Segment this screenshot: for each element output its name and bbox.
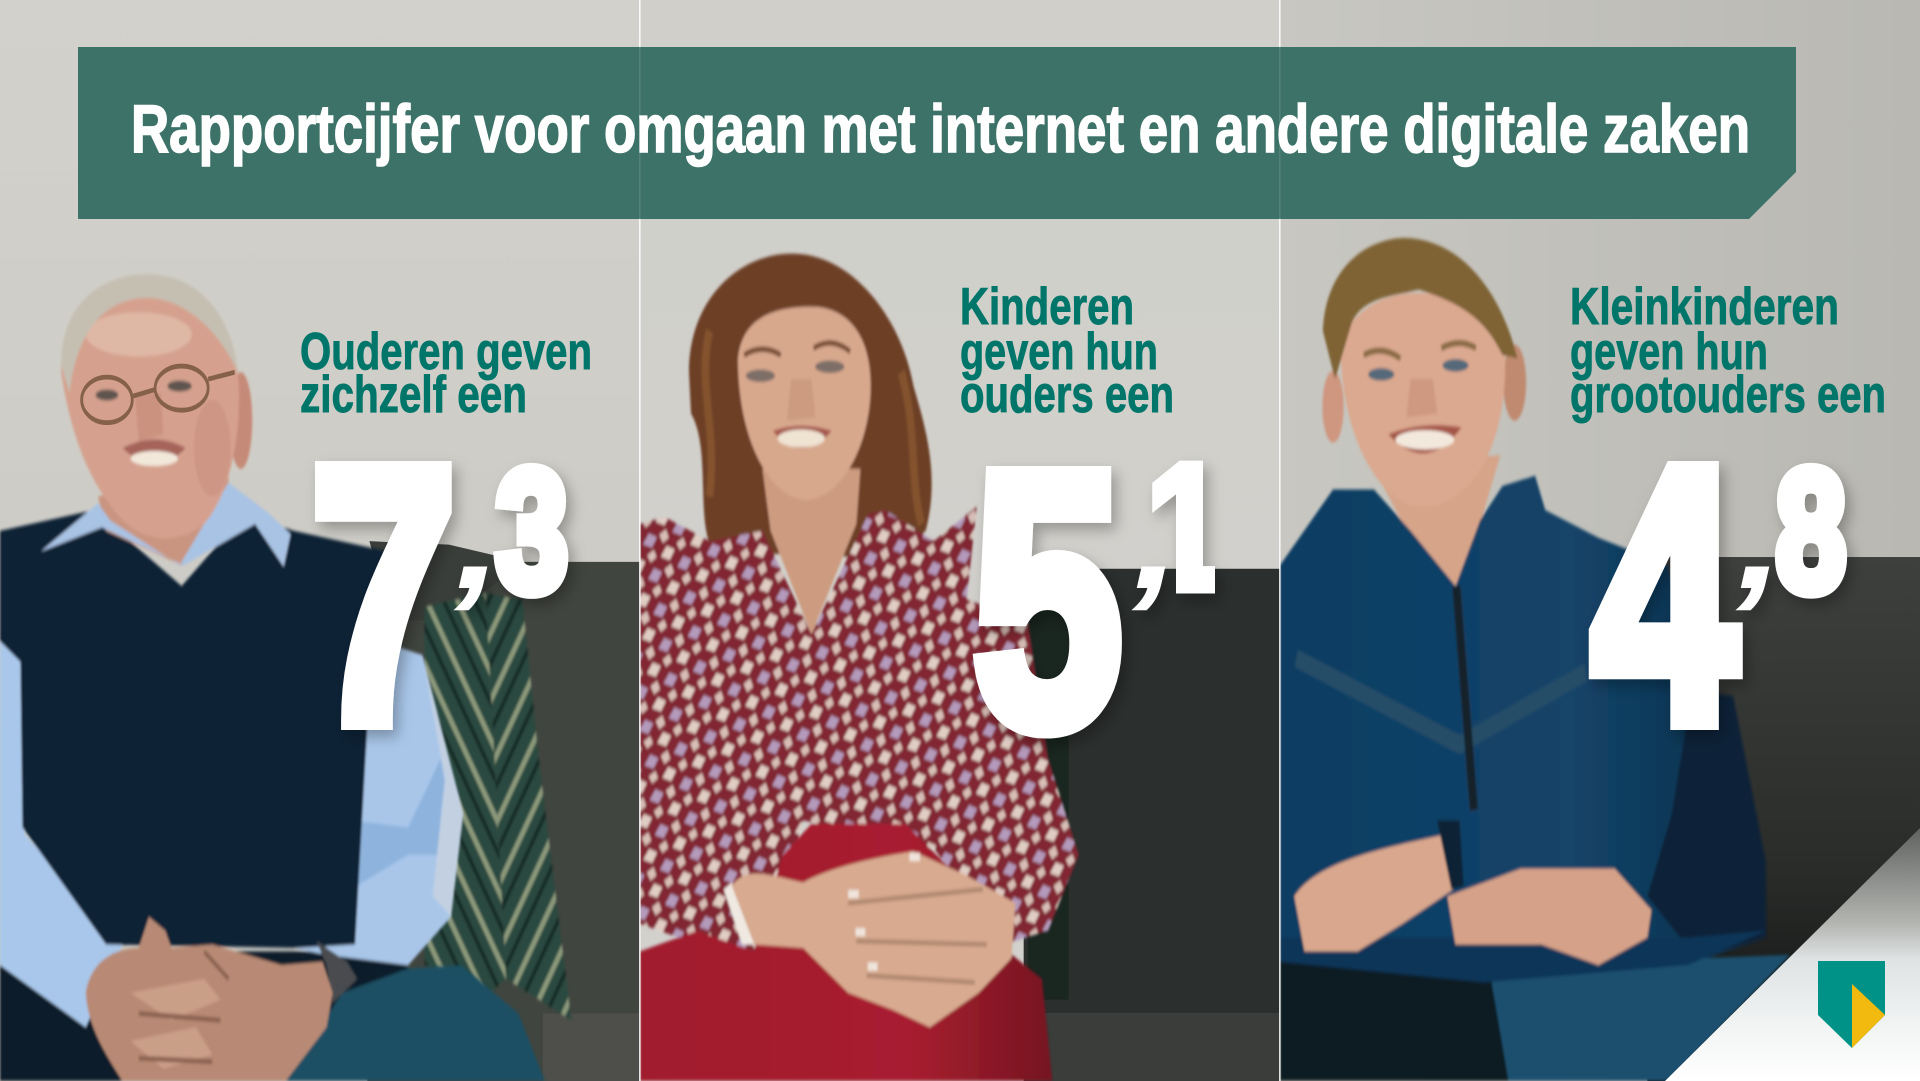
heading: ouderen: Ouderen geven: [300, 323, 592, 381]
jeans left: [1280, 951, 1541, 1081]
nose shade: [135, 393, 163, 441]
brows: [744, 343, 850, 355]
eyes: [746, 370, 775, 382]
wall: [640, 0, 1280, 1081]
sleeve shade: [356, 760, 445, 884]
nose shade: [1407, 379, 1437, 417]
icon: logo shield: [1818, 961, 1885, 1048]
panel: grandchild portrait: [1280, 0, 1920, 1081]
cuff: [1437, 820, 1464, 889]
hand left: [1294, 834, 1453, 951]
mouth shade: [122, 438, 186, 456]
nails: [848, 857, 920, 967]
score 4,8: [1592, 392, 1846, 797]
heading: kinderen: geven hun: [960, 323, 1158, 381]
title banner: [78, 47, 1796, 219]
finger highlights: [131, 979, 220, 1069]
trousers: [640, 824, 1052, 1081]
forehead highlight: [86, 312, 192, 356]
hands: [732, 851, 1016, 1027]
collar: [41, 483, 291, 567]
score 5,1: 1: [1146, 426, 1226, 628]
hoodie hem: [1280, 931, 1766, 982]
hoodie: [1280, 476, 1766, 979]
shirt left sleeve: [0, 638, 122, 1027]
mouth: [131, 451, 178, 466]
panel divider 1: [639, 0, 641, 1081]
face: [738, 307, 871, 500]
score 4,8: ,: [1735, 458, 1784, 619]
glasses: [82, 366, 235, 423]
panel divider 2: [1279, 0, 1281, 1081]
score 7,3: 3: [496, 435, 568, 627]
heading: ouderen: zichzelf een: [300, 366, 527, 424]
corner triangle: [1665, 828, 1920, 1081]
finger shadows: [848, 889, 987, 982]
panel: grandparent portrait: [0, 274, 640, 1081]
head: [61, 276, 239, 538]
hoodie stripe: [1296, 658, 1586, 745]
cheek shade: [194, 400, 231, 496]
neck: [762, 469, 860, 634]
score 4,8: 8: [1776, 435, 1846, 627]
banner seams: [640, 47, 1280, 219]
shirt right sleeve: [294, 634, 463, 965]
jeans right: [1488, 955, 1790, 1081]
navy vest: [0, 510, 388, 948]
jeans right: [282, 965, 545, 1081]
ear: [229, 372, 252, 469]
score 4,8: 4: [1592, 392, 1739, 797]
ears: [1322, 371, 1344, 443]
sleeve fold: [422, 655, 463, 917]
zipper: [1456, 586, 1474, 810]
heading: ouderen: [300, 323, 592, 424]
hands: [86, 917, 333, 1081]
hair: [689, 254, 932, 558]
heading: kleinkinderen: Kleinkinderen: [1570, 278, 1839, 336]
neck: [1374, 455, 1500, 586]
eyes: [1368, 368, 1394, 381]
sofa: [367, 541, 640, 1081]
heading: kinderen: [960, 278, 1174, 424]
blouse: [640, 507, 1079, 951]
sofa: [1024, 569, 1280, 1081]
wall: [1280, 0, 1920, 1081]
brows: [1364, 343, 1476, 358]
mouth: [778, 430, 825, 447]
banner shape: [78, 47, 1796, 219]
score 5,1: 5: [973, 399, 1122, 802]
hair: [1323, 238, 1518, 379]
sofa: [1647, 557, 1920, 1081]
hair strands: [705, 331, 922, 524]
score 7,3: ,: [453, 458, 502, 619]
hand right: [1447, 869, 1651, 965]
hoodie dark side: [1647, 689, 1766, 958]
heading: kleinkinderen: geven hun: [1570, 323, 1768, 381]
score 5,1: ,: [1131, 458, 1180, 619]
heading: kleinkinderen: [1570, 278, 1886, 424]
finger shadows: [139, 951, 229, 1062]
man: [0, 274, 545, 1081]
face: [1340, 293, 1505, 507]
pillow: [424, 593, 571, 1020]
score 7,3: 7: [311, 392, 456, 797]
score 5,1: [973, 399, 1226, 802]
hair: [61, 274, 238, 393]
boy: [1280, 238, 1790, 1081]
wall: [0, 0, 640, 1081]
cuff: [724, 882, 756, 944]
mouth shade: [1388, 425, 1462, 453]
neck: [98, 476, 229, 565]
heading: kinderen: Kinderen: [960, 278, 1134, 336]
heading: kinderen: ouders een: [960, 366, 1174, 424]
woman: [640, 254, 1079, 1081]
score 7,3: [311, 392, 568, 797]
eyes: [96, 390, 118, 401]
panel: parent portrait: [640, 251, 1280, 1081]
mouth shade: [773, 426, 832, 448]
watch: [316, 941, 357, 1003]
mouth: [1396, 430, 1454, 449]
lower body base: [0, 951, 408, 1081]
nose shade: [787, 379, 816, 421]
